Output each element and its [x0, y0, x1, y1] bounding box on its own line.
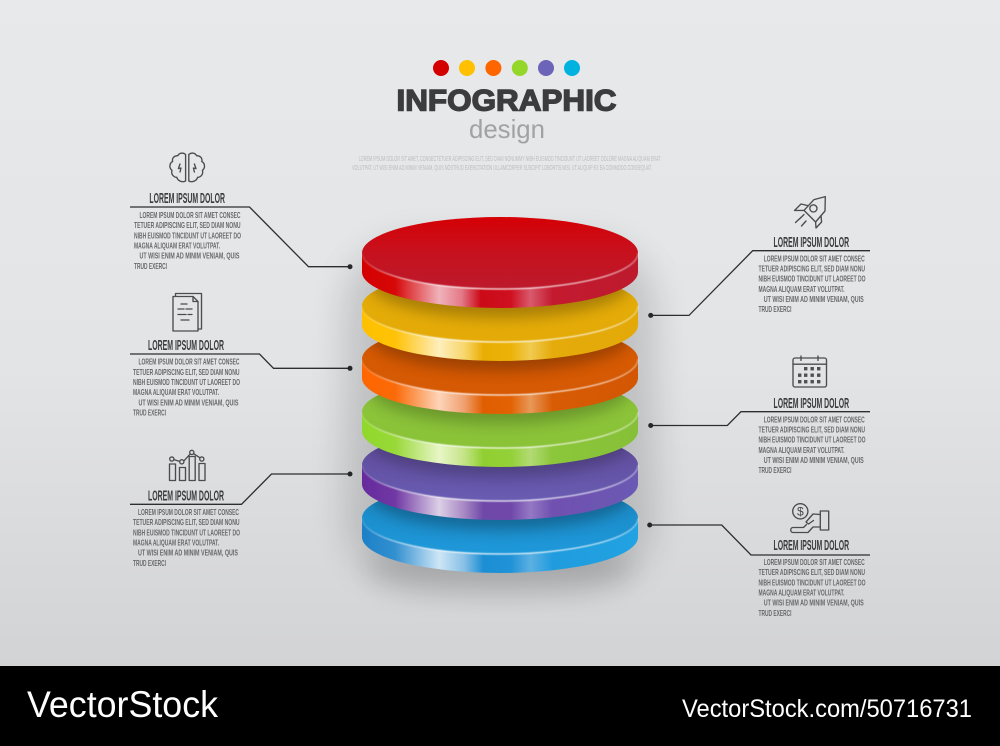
- body text: TRUD EXERCI: [133, 408, 166, 418]
- panel: right 2: [648, 356, 870, 475]
- panel: left 3: LOREM IPSUM DOLOR: [148, 487, 224, 504]
- body text: UT WISI ENIM AD MINIM VENIAM, QUIS: [140, 251, 240, 261]
- icon: hand with coin: $: [797, 505, 804, 519]
- intro text: VOLUTPAT. UT WISI ENIM AD MINIM VENIAM, QUIS NOSTRUD EXERCITATION ULLAMCORPER SUSCIPIT LOBORTIS NISL UT ALIQUIP EX EA COMMODO CONSEQUAT.: [352, 163, 652, 172]
- body text: [758, 414, 866, 475]
- disc: orange: [362, 342, 639, 414]
- icon: brain: [170, 153, 205, 182]
- body text: UT WISI ENIM AD MINIM VENIAM, QUIS: [138, 548, 238, 558]
- body text: TRUD EXERCI: [133, 558, 166, 568]
- subheading: design: [469, 114, 545, 144]
- disc: purple: [362, 448, 639, 520]
- body text: MAGNA ALIQUAM ERAT VOLUTPAT.: [758, 445, 844, 455]
- body text: LOREM IPSUM DOLOR SIT AMET CONSEC: [764, 557, 865, 567]
- panel: left 1: LOREM IPSUM DOLOR: [149, 190, 225, 207]
- body text: UT WISI ENIM AD MINIM VENIAM, QUIS: [138, 397, 239, 407]
- connector: [648, 412, 870, 428]
- body text: [134, 210, 241, 271]
- body text: NIBH EUISMOD TINCIDUNT UT LAOREET DO: [758, 274, 866, 284]
- body text: MAGNA ALIQUAM ERAT VOLUTPAT.: [133, 387, 219, 397]
- connector: [130, 354, 352, 371]
- title block: [352, 60, 661, 172]
- panel: left 2: [130, 294, 352, 418]
- body text: TETUER ADIPISCING ELIT, SED DIAM NONU: [133, 367, 240, 377]
- body text: TETUER ADIPISCING ELIT, SED DIAM NONU: [758, 424, 865, 434]
- cylinder shadow: [345, 240, 655, 594]
- body text: TRUD EXERCI: [134, 261, 167, 271]
- body text: [758, 253, 866, 314]
- body text: TETUER ADIPISCING ELIT, SED DIAM NONU: [758, 567, 865, 577]
- body text: LOREM IPSUM DOLOR SIT AMET CONSEC: [138, 507, 239, 517]
- connector: [130, 472, 352, 504]
- panel: left 2: LOREM IPSUM DOLOR: [148, 337, 224, 354]
- body text: MAGNA ALIQUAM ERAT VOLUTPAT.: [133, 538, 219, 548]
- body text: TRUD EXERCI: [758, 304, 792, 314]
- footer bar: [0, 666, 1000, 746]
- body text: NIBH EUISMOD TINCIDUNT UT LAOREET DO: [758, 577, 866, 587]
- connector: [130, 207, 352, 269]
- body text: [758, 557, 866, 618]
- heading: INFOGRAPHIC: [396, 84, 616, 117]
- connector: [647, 522, 870, 555]
- icon: calendar: [793, 356, 826, 387]
- panel: left 1: [130, 153, 352, 271]
- body text: LOREM IPSUM DOLOR SIT AMET CONSEC: [764, 414, 865, 424]
- panel: right 3: LOREM IPSUM DOLOR: [774, 537, 849, 554]
- body text: UT WISI ENIM AD MINIM VENIAM, QUIS: [764, 455, 864, 465]
- connector: [648, 251, 870, 318]
- body text: TETUER ADIPISCING ELIT, SED DIAM NONU: [758, 263, 865, 273]
- disc: red: [362, 217, 638, 308]
- body text: TETUER ADIPISCING ELIT, SED DIAM NONU: [133, 517, 240, 527]
- icon: rocket: [794, 197, 825, 228]
- panel: left 3: [130, 450, 352, 568]
- body text: UT WISI ENIM AD MINIM VENIAM, QUIS: [764, 598, 864, 608]
- intro text: [352, 154, 661, 172]
- body text: [133, 357, 240, 418]
- body text: TRUD EXERCI: [758, 608, 792, 618]
- disc: blue: [362, 501, 639, 573]
- body text: MAGNA ALIQUAM ERAT VOLUTPAT.: [758, 284, 844, 294]
- colour dots: [433, 60, 580, 76]
- disc: green: [362, 395, 639, 467]
- body text: [133, 507, 240, 568]
- panel: right 2: LOREM IPSUM DOLOR: [774, 395, 849, 412]
- body text: MAGNA ALIQUAM ERAT VOLUTPAT.: [758, 588, 844, 598]
- body text: NIBH EUISMOD TINCIDUNT UT LAOREET DO: [134, 230, 241, 240]
- body text: UT WISI ENIM AD MINIM VENIAM, QUIS: [764, 294, 864, 304]
- icon: hand with coin: [791, 504, 829, 532]
- body text: TETUER ADIPISCING ELIT, SED DIAM NONU: [134, 220, 240, 230]
- panel: right 1: [648, 197, 870, 318]
- icon: bar chart: [170, 450, 205, 480]
- body text: LOREM IPSUM DOLOR SIT AMET CONSEC: [140, 210, 240, 220]
- watermark url: VectorStock.com/50716731: [682, 695, 972, 723]
- intro text: LOREM IPSUM DOLOR SIT AMET, CONSECTETUER ADIPISCING ELIT, SED DIAM NONUMMY NIBH EUISMOD TINCIDUNT UT LAOREET DOLORE MAGNA ALIQUAM ERAT: [359, 154, 661, 163]
- disc: yellow: [362, 289, 639, 361]
- chart: stacked discs: [345, 217, 655, 594]
- body text: LOREM IPSUM DOLOR SIT AMET CONSEC: [138, 357, 240, 367]
- body text: LOREM IPSUM DOLOR SIT AMET CONSEC: [764, 253, 865, 263]
- panel: right 1: LOREM IPSUM DOLOR: [774, 234, 849, 251]
- body text: MAGNA ALIQUAM ERAT VOLUTPAT.: [134, 240, 220, 250]
- watermark logo text: VectorStock: [27, 684, 218, 725]
- panel: right 3: [647, 504, 870, 618]
- body text: NIBH EUISMOD TINCIDUNT UT LAOREET DO: [133, 377, 240, 387]
- body text: NIBH EUISMOD TINCIDUNT UT LAOREET DO: [133, 527, 240, 537]
- body text: NIBH EUISMOD TINCIDUNT UT LAOREET DO: [758, 435, 866, 445]
- icon: document: [173, 294, 202, 331]
- body text: TRUD EXERCI: [758, 465, 792, 475]
